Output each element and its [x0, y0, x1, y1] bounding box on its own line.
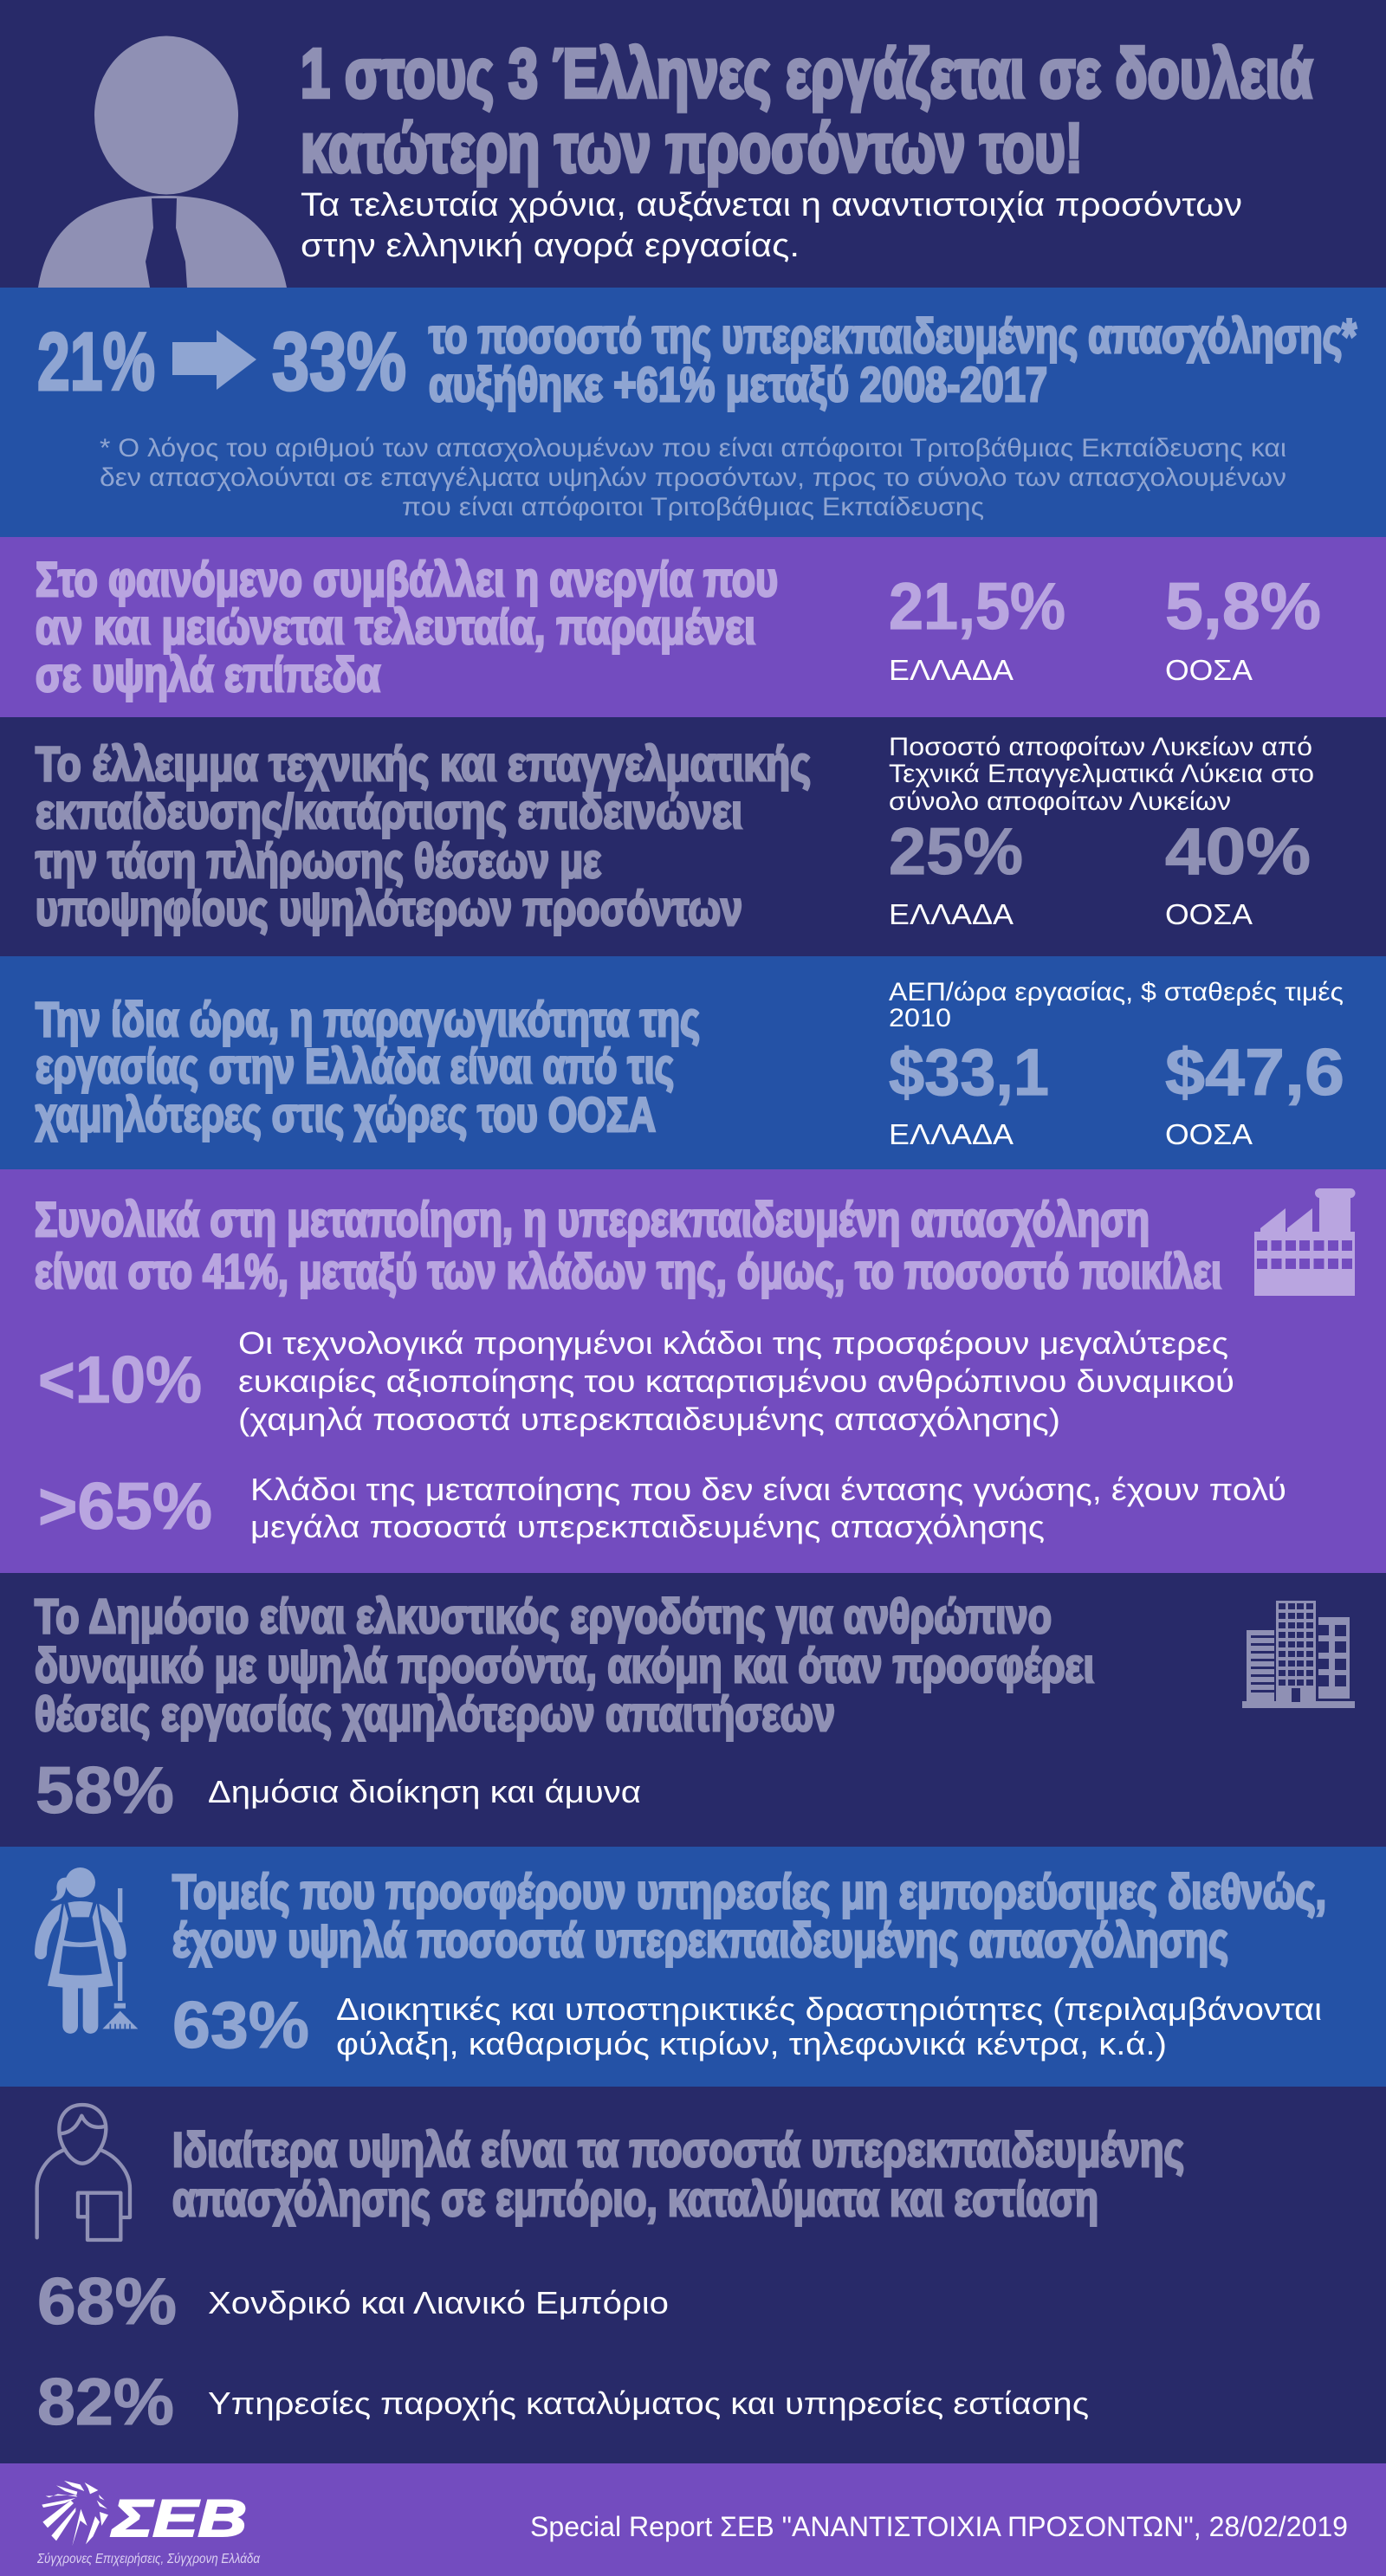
footnote: * Ο λόγος του αριθμού των απασχολουμένων που είναι απόφοιτοι Τριτοβάθμιας Εκπαίδευσης και — [100, 434, 1286, 463]
stat: 33%: 33% — [272, 316, 406, 408]
stat: 21%: 21% — [37, 316, 155, 408]
subtitle: Τα τελευταία χρόνια, αυξάνεται η αναντιστοιχία προσόντων — [301, 187, 1242, 223]
stat: Greece: ΕΛΛΑΔΑ — [889, 654, 1014, 686]
panel: productivity — [0, 956, 1386, 1169]
panel: overeducation rise — [0, 288, 1386, 537]
stat: Greece: $33,1 — [889, 1036, 1049, 1110]
heading: δυναμικό με υψηλά προσόντα, ακόμη και όταν προσφέρει — [35, 1638, 1094, 1693]
stat: Greece — [889, 815, 1023, 930]
stat: OECD: 5,8% — [1165, 570, 1321, 644]
indicator description: σύνολο αποφοίτων Λυκείων — [889, 787, 1231, 816]
label: accommodation and food: Υπηρεσίες παροχής καταλύματος και υπηρεσίες εστίασης — [208, 2385, 1089, 2421]
heading: Την ίδια ώρα, η παραγωγικότητα της — [36, 992, 700, 1046]
stat: OECD — [1165, 815, 1311, 930]
heading — [36, 552, 778, 702]
indicator description: ΑΕΠ/ώρα εργασίας, $ σταθερές τιμές — [889, 978, 1344, 1006]
subtitle — [301, 187, 1242, 264]
panel: unemployment — [0, 537, 1386, 717]
panel: manufacturing — [0, 1169, 1386, 1573]
icon: businessman silhouette — [38, 36, 287, 288]
heading: Το έλλειμμα τεχνικής και επαγγελματικής — [36, 736, 811, 791]
heading — [36, 736, 811, 935]
stat: OECD — [1165, 570, 1321, 686]
stat: 63%: 63% — [172, 1989, 309, 2062]
stat: OECD: ΟΟΣΑ — [1165, 898, 1253, 930]
heading: Στο φαινόμενο συμβάλλει η ανεργία που — [36, 552, 778, 606]
heading — [429, 308, 1357, 411]
stat: OECD — [1165, 1036, 1344, 1150]
heading: θέσεις εργασίας χαμηλότερων απαιτήσεων — [35, 1686, 835, 1741]
heading — [172, 1864, 1326, 1967]
heading — [172, 2122, 1184, 2226]
title: κατώτερη των προσόντων του! — [301, 109, 1083, 186]
heading — [36, 992, 700, 1142]
heading: απασχόλησης σε εμπόριο, καταλύματα και εστίαση — [172, 2171, 1098, 2226]
heading: εργασίας στην Ελλάδα είναι από τις — [36, 1039, 674, 1093]
subtitle: στην ελληνική αγορά εργασίας. — [301, 228, 800, 264]
arrow — [172, 330, 256, 390]
label: wholesale and retail: Χονδρικό και Λιανικό Εμπόριο — [208, 2285, 669, 2320]
heading: χαμηλότερες στις χώρες του ΟΟΣΑ — [36, 1087, 656, 1142]
indicator description: Ποσοστό αποφοίτων Λυκείων από — [889, 733, 1312, 761]
text: advanced sectors — [238, 1325, 1234, 1437]
panel: trade and hospitality — [0, 2087, 1386, 2463]
text: advanced sectors: ευκαιρίες αξιοποίησης του καταρτισμένου ανθρώπινου δυναμικού — [238, 1363, 1234, 1399]
stat: OECD: $47,6 — [1165, 1036, 1344, 1110]
stat: more than 65%: >65% — [38, 1470, 212, 1544]
panel: non-tradable services — [0, 1847, 1386, 2087]
logo: SEV — [36, 2481, 261, 2566]
footnote — [100, 434, 1286, 521]
text: non knowledge-intensive sectors: Κλάδοι της μεταποίησης που δεν είναι έντασης γνώσης, έχουν πολύ — [250, 1472, 1286, 1507]
heading: την τάση πλήρωσης θέσεων με — [36, 833, 601, 888]
indicator description: Τεχνικά Επαγγελματικά Λύκεια στο — [889, 760, 1314, 788]
icon: office buildings — [1242, 1601, 1355, 1708]
stat: 82%: 82% — [37, 2366, 174, 2439]
heading: σε υψηλά επίπεδα — [36, 647, 380, 702]
text: non knowledge-intensive sectors: μεγάλα ποσοστά υπερεκπαιδευμένης απασχόλησης — [250, 1509, 1045, 1544]
text: administrative activities: φύλαξη, καθαρισμός κτιρίων, τηλεφωνικά κέντρα, κ.ά.) — [336, 2026, 1167, 2061]
footnote: που είναι απόφοιτοι Τριτοβάθμιας Εκπαίδευσης — [402, 493, 984, 521]
heading: υποψηφίους υψηλότερων προσόντων — [36, 881, 742, 935]
panel: header — [0, 0, 1386, 288]
heading — [35, 1192, 1221, 1298]
stat: Greece: ΕΛΛΑΔΑ — [889, 898, 1014, 930]
indicator description: 2010 — [889, 1004, 951, 1032]
stat: 68%: 68% — [37, 2265, 177, 2339]
stat: less than 10%: <10% — [38, 1343, 202, 1417]
stat: Greece: 25% — [889, 815, 1023, 889]
heading — [35, 1589, 1094, 1741]
indicator description — [889, 733, 1314, 816]
heading: αυξήθηκε +61% μεταξύ 2008-2017 — [429, 357, 1047, 411]
stat: 58%: 58% — [36, 1754, 174, 1828]
logo: SEV: ΣΕΒ — [110, 2489, 247, 2547]
stat: Greece — [889, 570, 1065, 686]
icon: cleaner with broom — [41, 1867, 138, 2034]
stat: Greece — [889, 1036, 1049, 1150]
source line: Special Report ΣΕΒ "ΑΝΑΝΤΙΣΤΟΙΧΙΑ ΠΡΟΣΟΝΤΩΝ", 28/02/2019 — [530, 2511, 1348, 2542]
stat: Greece: ΕΛΛΑΔΑ — [889, 1118, 1014, 1150]
text: advanced sectors: Οι τεχνολογικά προηγμένοι κλάδοι της προσφέρουν μεγαλύτερες — [238, 1325, 1228, 1361]
heading: εκπαίδευσης/κατάρτισης επιδεινώνει — [36, 784, 742, 838]
text: administrative activities — [336, 1991, 1322, 2061]
label: public administration: Δημόσια διοίκηση και άμυνα — [208, 1774, 641, 1809]
text: advanced sectors: (χαμηλά ποσοστά υπερεκπαιδευμένης απασχόλησης) — [238, 1401, 1060, 1437]
stat: OECD: 40% — [1165, 815, 1311, 889]
indicator description — [889, 978, 1344, 1032]
heading: αν και μειώνεται τελευταία, παραμένει — [36, 599, 755, 654]
logo: SEV: Σύγχρονες Επιχειρήσεις, Σύγχρονη Ελλάδα — [36, 2552, 261, 2566]
stat: OECD: ΟΟΣΑ — [1165, 654, 1253, 686]
stat: Greece: 21,5% — [889, 570, 1065, 644]
text: administrative activities: Διοικητικές και υποστηρικτικές δραστηριότητες (περιλαμβάνονται — [336, 1991, 1322, 2027]
heading: Το Δημόσιο είναι ελκυστικός εργοδότης για ανθρώπινο — [35, 1589, 1052, 1643]
text: non knowledge-intensive sectors — [250, 1472, 1286, 1544]
panel: technical education — [0, 717, 1386, 956]
panel: public sector — [0, 1573, 1386, 1847]
icon: factory — [1254, 1188, 1356, 1296]
stat: OECD: ΟΟΣΑ — [1165, 1118, 1253, 1150]
icon: person with tablet — [37, 2105, 130, 2240]
title — [301, 35, 1312, 186]
panel: footer — [0, 2463, 1386, 2576]
footnote: δεν απασχολούνται σε επαγγέλματα υψηλών προσόντων, προς το σύνολο των απασχολουμένων — [100, 463, 1286, 492]
